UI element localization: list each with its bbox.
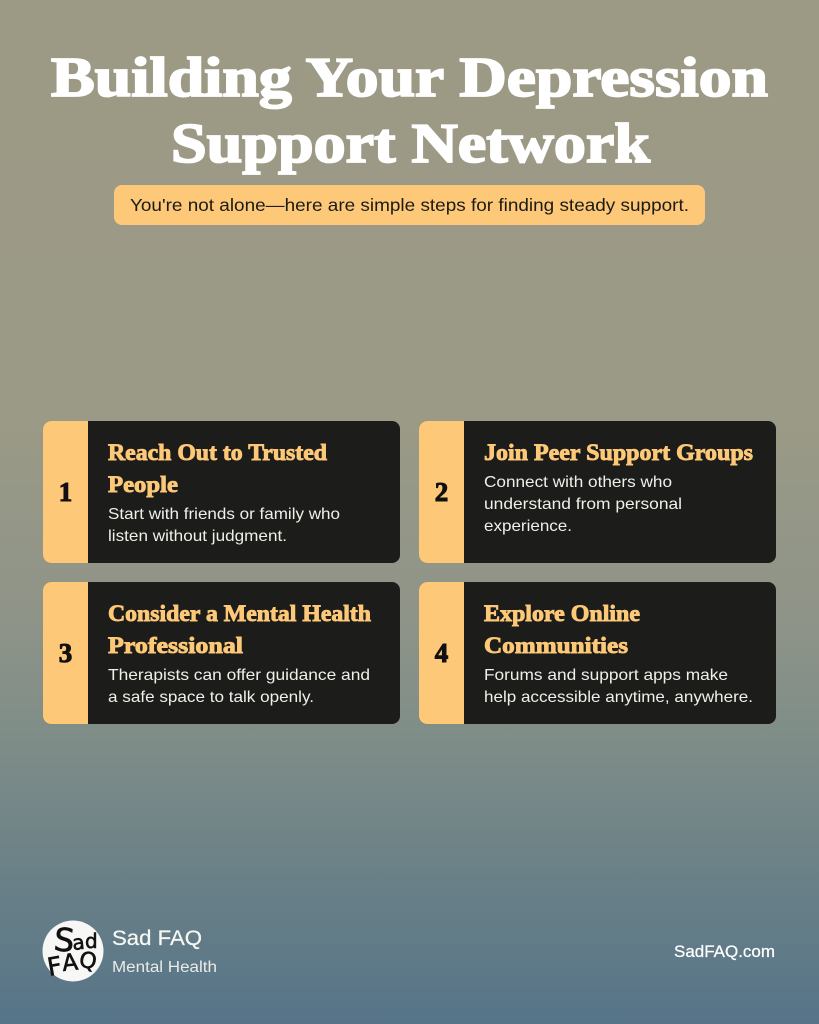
panel: step 3: 3 [59,638,72,668]
panel: step 1: listen without judgment. [108,528,287,545]
icon: Sad FAQ logo: A [61,949,80,977]
panel: step 2 [419,421,776,563]
subtitle pill: You're not alone—here are simple steps for finding steady support. [130,195,689,215]
panel: step 3: Consider a Mental Health [108,601,371,626]
panel: step 1: 1 [59,477,72,507]
icon: Sad FAQ logo [42,920,104,982]
title [51,47,768,175]
icon: Sad FAQ logo: S [52,920,76,960]
panel: step 2: 2 [435,477,448,507]
brand name: Sad FAQ [112,927,202,950]
panel: step 4: Forums and support apps make [484,667,728,684]
title: Building Your Depression [51,47,768,109]
title: Support Network [171,113,651,175]
icon: Sad FAQ logo: F [45,951,64,982]
panel: step 1: Start with friends or family who [108,506,340,523]
panel: step 4: Explore Online [484,601,640,626]
brand tagline: Mental Health [112,959,217,976]
icon: Sad FAQ logo: a [71,930,86,955]
panel: step 2: understand from personal [484,496,682,513]
panel: step 1 [43,421,400,563]
panel: step 3 [43,582,400,724]
icon: Sad FAQ logo: Q [77,947,99,975]
panel: step 4 [419,582,776,724]
panel: step 4: help accessible anytime, anywhere. [484,689,753,706]
panel: step 1: People [108,472,178,497]
panel: step 4: Communities [484,633,628,658]
panel: step 2: Join Peer Support Groups [484,440,753,465]
panel: step 2: experience. [484,518,572,535]
panel: step 3: Professional [108,633,243,658]
subtitle pill [114,185,705,225]
panel: step 3: a safe space to talk openly. [108,689,314,706]
panel: step 2: Connect with others who [484,474,672,491]
panel: step 1: Reach Out to Trusted [108,440,327,465]
panel: step 3: Therapists can offer guidance and [108,667,370,684]
panel: step 4: 4 [435,638,448,668]
website: SadFAQ.com [674,943,775,961]
icon: Sad FAQ logo: d [85,929,98,953]
